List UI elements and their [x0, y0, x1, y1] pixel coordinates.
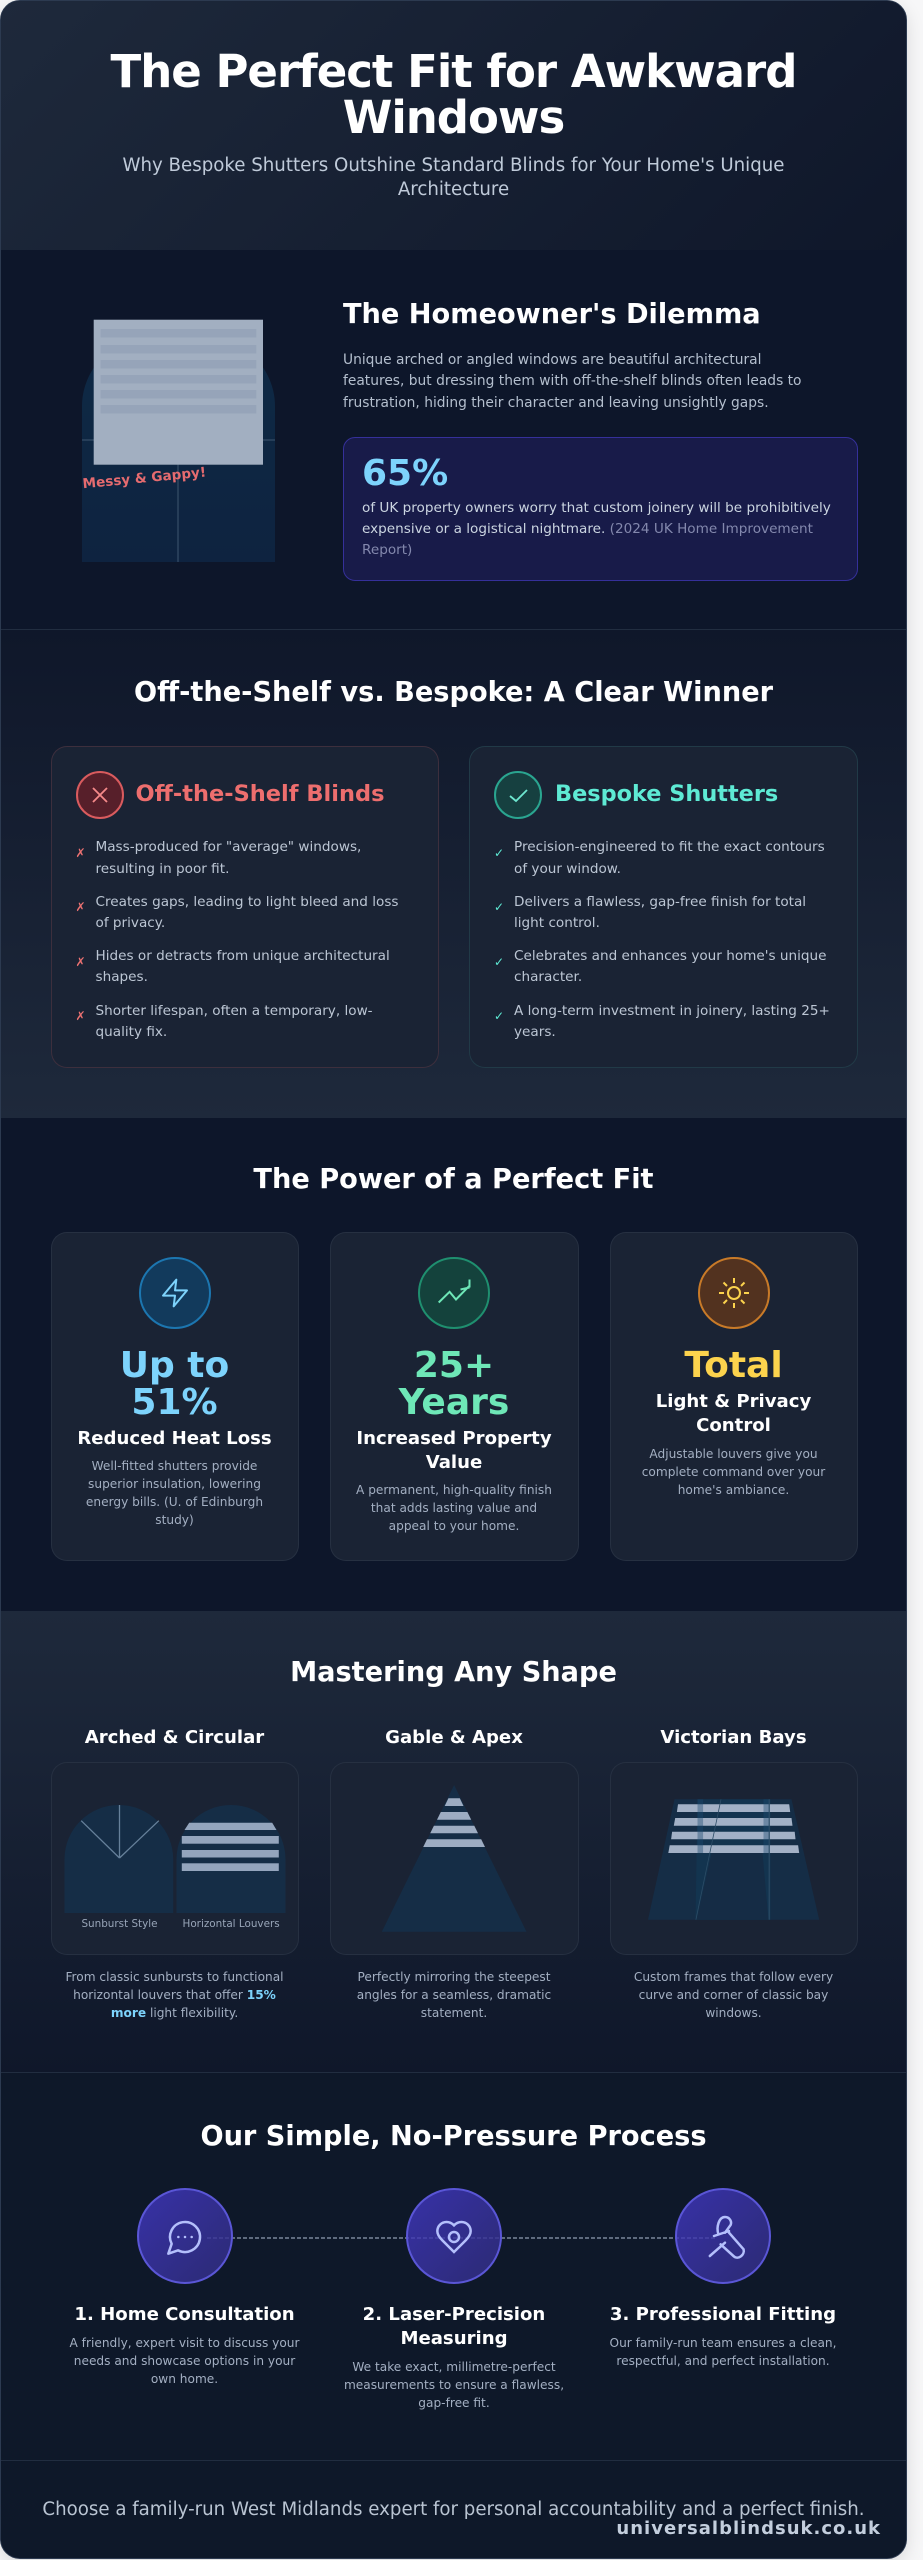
icon: cross — [76, 771, 124, 819]
list item: of privacy. — [96, 915, 165, 931]
icon: lightning bolt — [138, 1257, 210, 1329]
heading: Our Simple, No-Pressure Process — [200, 2121, 707, 2152]
list item: ✗ — [76, 955, 86, 969]
description: arched — [65, 1970, 284, 2020]
list item: Delivers a flawless, gap-free finish for total — [514, 894, 806, 910]
icon: check — [494, 771, 542, 819]
step 2 description: gap-free fit. — [418, 2396, 490, 2410]
description: appeal to your home. — [389, 1519, 519, 1533]
panel: comparison — [0, 629, 907, 1119]
step 2 description: measurements to ensure a flawless, — [344, 2378, 564, 2392]
description: gable: Perfectly mirroring the steepest — [357, 1970, 551, 1984]
description: complete command over your — [642, 1465, 825, 1479]
title: Windows — [343, 91, 564, 144]
icon: trend line — [418, 1257, 490, 1329]
stat label — [656, 1391, 811, 1436]
list item: character. — [514, 969, 582, 985]
step 2 title — [363, 2304, 545, 2349]
description: arched: horizontal louvers that offer 15% — [73, 1988, 276, 2002]
list item: years. — [514, 1024, 556, 1040]
description — [642, 1447, 826, 1497]
list item: quality fix. — [96, 1024, 167, 1040]
list item: Hides or detracts from unique architectural — [96, 948, 390, 964]
description: bay: curve and corner of classic bay — [639, 1988, 828, 2002]
step 2 title: Measuring — [400, 2328, 508, 2349]
card: property value — [330, 1232, 578, 1561]
step 2 title: 2. Laser-Precision — [363, 2304, 545, 2325]
description: Adjustable louvers give you — [649, 1447, 818, 1461]
panel: header — [0, 0, 907, 251]
list item — [76, 894, 398, 931]
description — [86, 1459, 263, 1527]
icon: chat bubble — [136, 2188, 232, 2284]
list item: Celebrates and enhances your home's unique — [514, 948, 826, 964]
list item: Shorter lifespan, often a temporary, low- — [96, 1003, 373, 1019]
card heading: Bespoke Shutters — [555, 781, 778, 807]
stat description — [362, 500, 831, 558]
illustration: sunburst and louvered arches: Sunburst Style — [81, 1918, 157, 1930]
description: bay — [634, 1970, 833, 2020]
step 3 description — [610, 2336, 836, 2368]
list item: of your window. — [514, 861, 621, 877]
description: home's ambiance. — [678, 1483, 789, 1497]
step 1 description — [70, 2336, 300, 2386]
closing line: Choose a family-run West Midlands expert for personal accountability and a perfect finish. — [42, 2499, 865, 2520]
step 1 description: A friendly, expert visit to discuss your — [70, 2336, 299, 2350]
stat label: Control — [696, 1415, 771, 1436]
panel: the power of a perfect fit — [0, 1118, 907, 1612]
stat value — [398, 1345, 509, 1423]
icon: heart with circle — [406, 2188, 502, 2284]
description: bay: Custom frames that follow every — [634, 1970, 833, 1984]
step 3 description: Our family-run team ensures a clean, — [610, 2336, 836, 2350]
subheading: bay: Victorian Bays — [660, 1727, 807, 1748]
card: heat loss — [50, 1232, 298, 1561]
illustration: three-pane bay shutter — [648, 1799, 819, 1920]
description: arched: more light flexibility. — [111, 2006, 238, 2020]
illustration: triangular gable shutter — [382, 1786, 526, 1932]
card: gable window — [330, 1762, 578, 1955]
step 1 title: 1. Home Consultation — [74, 2304, 295, 2325]
title: The Perfect Fit for Awkward — [111, 45, 796, 98]
description — [356, 1483, 552, 1533]
card: bay window — [610, 1762, 858, 1955]
text block: features, but dressing them with off-the-shelf blinds often leads to — [343, 373, 802, 389]
stat label: Value — [426, 1452, 482, 1473]
icon: sun — [698, 1257, 770, 1329]
list item: A long-term investment in joinery, lasting 25+ — [514, 1003, 830, 1019]
heading: Mastering Any Shape — [290, 1657, 617, 1688]
description: energy bills. (U. of Edinburgh — [86, 1495, 263, 1509]
stat description: of UK property owners worry that custom joinery will be prohibitively — [362, 500, 831, 516]
illustration: arched window with ill-fitting blind: Messy & Gappy! — [82, 464, 207, 492]
text block: Unique arched or angled windows are beautiful architectural — [343, 352, 761, 368]
list item: Mass-produced for "average" windows, — [96, 839, 361, 855]
stat number: 65% — [362, 452, 448, 494]
description: that adds lasting value and — [371, 1501, 537, 1515]
stat description: Report) — [362, 542, 412, 558]
card: arched windows — [50, 1762, 298, 1955]
list item: resulting in poor fit. — [96, 861, 229, 877]
callout: 65% stat — [343, 437, 858, 580]
list item: Creates gaps, leading to light bleed and loss — [96, 894, 398, 910]
list item — [76, 1003, 373, 1040]
website: universalblindsuk.co.uk — [616, 2518, 881, 2539]
list item: light control. — [514, 915, 600, 931]
illustration: sunburst and louvered arches: Horizontal Louvers — [182, 1918, 279, 1930]
subtitle — [122, 155, 784, 200]
list item: ✗ — [76, 846, 86, 860]
description: Well-fitted shutters provide — [92, 1459, 257, 1473]
description: study) — [155, 1513, 194, 1527]
stat value: Total — [684, 1345, 783, 1386]
description: arched: From classic sunbursts to functional — [65, 1970, 284, 1984]
text block — [343, 352, 802, 411]
list item: ✓ — [494, 846, 504, 860]
stat label: Light & Privacy — [656, 1391, 811, 1412]
stat label: Increased Property — [356, 1428, 552, 1449]
panel: the homeowner's dilemma — [0, 250, 907, 630]
stat value — [120, 1345, 229, 1423]
list item — [494, 948, 826, 985]
step 3 description: respectful, and perfect installation. — [616, 2354, 830, 2368]
step 1 description: needs and showcase options in your — [74, 2354, 295, 2368]
list item: ✓ — [494, 1009, 504, 1023]
card heading: Off-the-Shelf Blinds — [136, 781, 384, 807]
stat value: Years — [399, 1382, 509, 1423]
list item: ✗ — [76, 1009, 86, 1023]
list item: ✗ — [76, 900, 86, 914]
heading: Off-the-Shelf vs. Bespoke: A Clear Winner — [134, 677, 773, 708]
subheading: gable: Gable & Apex — [385, 1727, 523, 1748]
panel: process — [0, 2072, 907, 2461]
stat value: 51% — [131, 1382, 218, 1423]
step 1 description: own home. — [151, 2372, 218, 2386]
card: light and privacy — [610, 1232, 858, 1561]
list item: ✓ — [494, 955, 504, 969]
subtitle: Why Bespoke Shutters Outshine Standard Blinds for Your Home's Unique — [122, 155, 784, 176]
description: gable: angles for a seamless, dramatic — [357, 1988, 551, 2002]
list item: ✓ — [494, 900, 504, 914]
icon: fitting tool — [675, 2188, 771, 2284]
panel: bespoke shutters — [469, 746, 858, 1068]
connector: dashed line — [207, 2236, 715, 2238]
description: gable — [357, 1970, 551, 2020]
step 3 title: 3. Professional Fitting — [610, 2304, 836, 2325]
list item — [494, 894, 806, 931]
heading: The Homeowner's Dilemma — [343, 299, 761, 330]
stat description: expensive or a logistical nightmare. (2024 UK Home Improvement — [362, 521, 813, 537]
stat label: Reduced Heat Loss — [77, 1428, 272, 1449]
step 2 description — [344, 2360, 564, 2410]
list item — [494, 1003, 830, 1040]
panel: footer — [0, 2460, 907, 2560]
heading: The Power of a Perfect Fit — [253, 1164, 654, 1195]
subtitle: Architecture — [398, 179, 509, 200]
illustration: arched window with ill-fitting blind — [82, 320, 275, 562]
description: superior insulation, lowering — [88, 1477, 261, 1491]
illustration: sunburst and louvered arches — [64, 1805, 286, 1930]
title — [110, 45, 796, 144]
stat value: Up to — [120, 1345, 229, 1386]
description: A permanent, high-quality finish — [356, 1483, 552, 1497]
step 2 description: We take exact, millimetre-perfect — [352, 2360, 556, 2374]
text block: frustration, hiding their character and leaving unsightly gaps. — [343, 395, 769, 411]
panel: off-the-shelf blinds — [50, 746, 438, 1068]
list item — [76, 839, 361, 877]
subheading: arched: Arched & Circular — [85, 1727, 264, 1748]
list item — [76, 948, 390, 985]
stat value: 25+ — [414, 1345, 494, 1386]
list item — [494, 839, 825, 877]
list item: shapes. — [96, 969, 148, 985]
panel: mastering any shape — [0, 1611, 907, 2073]
description: bay: windows. — [705, 2006, 762, 2020]
description: gable: statement. — [421, 2006, 487, 2020]
list item: Precision-engineered to fit the exact contours — [514, 839, 825, 855]
stat label — [356, 1428, 552, 1473]
